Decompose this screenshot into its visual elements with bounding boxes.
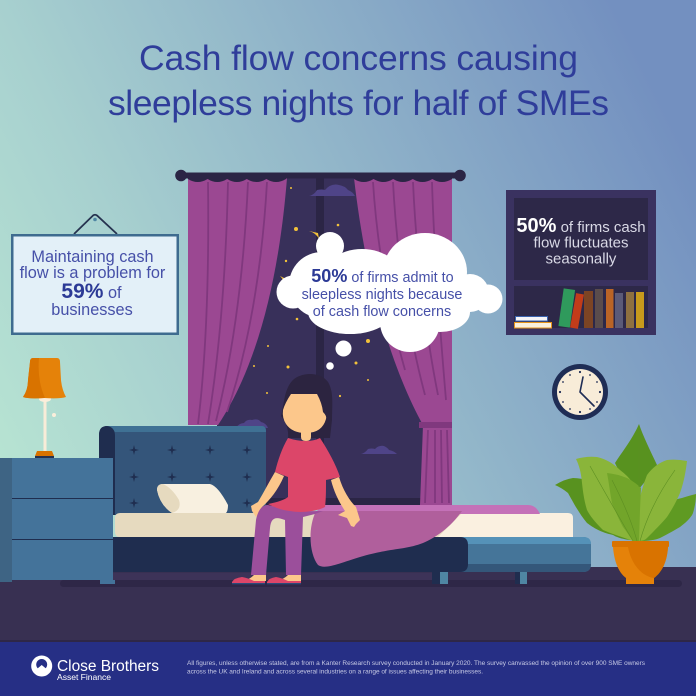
footer band: [0, 642, 696, 696]
shirt: [268, 438, 340, 512]
cloud text: of cash flow concerns: [313, 304, 451, 320]
bed: [113, 513, 591, 584]
valance scallops: [188, 176, 286, 182]
headboard: [99, 426, 266, 515]
cloud text: 50% of firms admit to: [311, 266, 454, 286]
shelf text: flow fluctuates: [533, 234, 629, 252]
pants: [251, 505, 323, 575]
thought bubbles: [326, 340, 352, 370]
right curtain: [354, 176, 452, 505]
pillow: [157, 484, 228, 513]
floor: [0, 567, 696, 643]
arms: [251, 472, 284, 517]
tufted buttons: [129, 445, 252, 508]
framed sign: [12, 215, 178, 334]
lamp: [23, 358, 66, 458]
shelf text: [516, 215, 646, 268]
sign text: Maintaining cash: [31, 248, 154, 266]
hanger: [74, 215, 117, 234]
logo: [31, 656, 159, 682]
footnote: All figures, unless otherwise stated, are from a Kanter Research survey conducted in January 2020. The survey canvassed the opinion of over 900 SME owners: [187, 660, 646, 667]
title: Cash flow concerns causing: [139, 38, 578, 78]
sign text: 59% of: [61, 280, 122, 303]
title: sleepless nights for half of SMEs: [108, 83, 609, 123]
sign text: flow is a problem for: [20, 264, 166, 282]
night clouds: [236, 185, 397, 454]
pot: [612, 541, 669, 584]
left curtain: [188, 176, 287, 425]
bench end: [433, 537, 591, 584]
thought cloud: [276, 232, 502, 352]
window: [217, 176, 425, 506]
shelf text: 50% of firms cash: [516, 215, 646, 237]
curtain rod: [175, 170, 466, 181]
feet and slippers: [232, 575, 301, 584]
nightstand: [0, 458, 115, 584]
title: [108, 38, 609, 123]
mattress: [115, 513, 468, 537]
leaves: [555, 424, 696, 541]
blanket: [310, 505, 540, 567]
wall clock: [552, 364, 608, 420]
bookshelf: [506, 190, 656, 335]
footnote: across the UK and Ireland and across several industries on a range of issues affecting their businesses.: [187, 668, 483, 676]
sign text: businesses: [51, 301, 133, 319]
neck and face: [301, 428, 311, 441]
bed base: [113, 537, 468, 572]
person: [232, 374, 360, 584]
shelf text: seasonally: [546, 250, 617, 268]
books: [514, 288, 644, 329]
cloud text: sleepless nights because: [302, 287, 462, 303]
potted plant: [555, 424, 696, 584]
footnote: [187, 660, 646, 676]
logo: Asset Finance: [57, 672, 111, 682]
sign text: [20, 248, 166, 319]
cloud text: [302, 266, 462, 320]
logo: Close Brothers: [57, 658, 159, 675]
stars and moons: [253, 187, 370, 397]
hair: [281, 374, 332, 438]
